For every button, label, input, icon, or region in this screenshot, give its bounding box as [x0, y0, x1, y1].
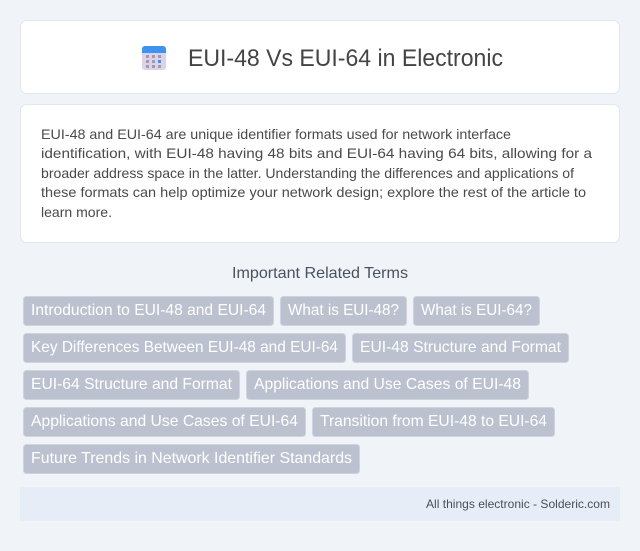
intro text — [41, 126, 592, 220]
tag — [24, 370, 240, 400]
tag: Applications and Use Cases of EUI-48 — [254, 376, 521, 393]
tag — [24, 408, 306, 436]
tag: Applications and Use Cases of EUI-64 — [31, 413, 298, 430]
title: EUI-48 Vs EUI-64 in Electronic — [188, 45, 503, 72]
tag — [24, 444, 360, 474]
tag: EUI-64 Structure and Format — [31, 376, 233, 393]
tag: Introduction to EUI-48 and EUI-64 — [31, 302, 266, 319]
tag: EUI-48 Structure and Format — [360, 339, 562, 356]
heading: related terms: Important Related Terms — [232, 265, 408, 282]
tag: What is EUI-48? — [288, 302, 399, 319]
tag — [246, 370, 528, 400]
tag — [312, 408, 554, 436]
tag — [414, 296, 540, 326]
footer text: All things electronic - Solderic.com — [426, 497, 610, 511]
intro text: learn more. — [41, 204, 112, 220]
tag — [280, 296, 406, 326]
tag: Key Differences Between EUI-48 and EUI-64 — [31, 339, 338, 356]
title card — [20, 20, 620, 94]
tag: Future Trends in Network Identifier Standards — [31, 450, 352, 467]
tag: Transition from EUI-48 to EUI-64 — [320, 413, 547, 430]
intro text: EUI-48 and EUI-64 are unique identifier formats used for network interface — [41, 126, 511, 142]
tag list — [24, 296, 568, 474]
tag: What is EUI-64? — [421, 302, 532, 319]
intro text: broader address space in the latter. Understanding the differences and applications of — [41, 165, 574, 181]
icon: calendar — [142, 46, 166, 70]
tag — [24, 296, 274, 326]
intro text: these formats can help optimize your network design; explore the rest of the article to — [41, 184, 586, 200]
intro text: identification, with EUI-48 having 48 bits and EUI-64 having 64 bits, allowing for a — [41, 145, 592, 161]
panel: introduction — [20, 104, 620, 242]
tag — [24, 334, 346, 362]
tag — [352, 334, 568, 362]
footer bar — [20, 487, 620, 521]
